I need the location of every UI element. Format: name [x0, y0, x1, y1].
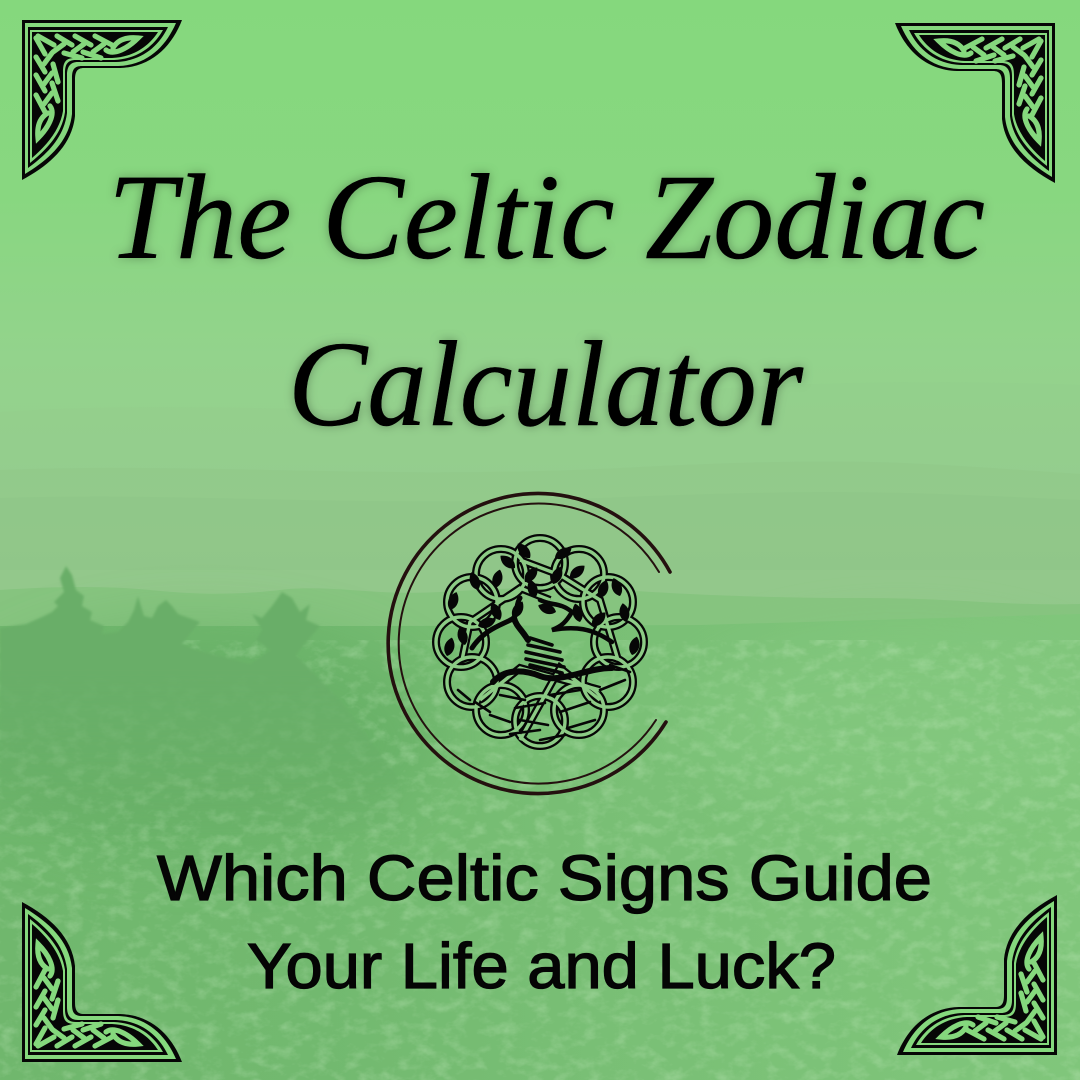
title	[108, 150, 985, 452]
corner ornament: top left	[22, 20, 182, 180]
leaves	[442, 540, 642, 657]
icon: tree of life medallion	[388, 494, 670, 794]
corner ornament: bottom left	[22, 902, 182, 1062]
trunk and branches	[472, 598, 612, 682]
corner ornament: top right	[895, 23, 1055, 183]
subtitle: Your Life and Luck?	[247, 930, 836, 1002]
subtitle	[157, 842, 932, 1002]
water lines below tree	[458, 665, 630, 740]
subtitle: Which Celtic Signs Guide	[157, 842, 932, 914]
title: Calculator	[288, 317, 804, 452]
knotwork ribbon	[436, 538, 644, 746]
title: The Celtic Zodiac	[108, 150, 985, 285]
double open ring	[388, 494, 670, 794]
corner ornament: bottom right	[897, 895, 1057, 1055]
